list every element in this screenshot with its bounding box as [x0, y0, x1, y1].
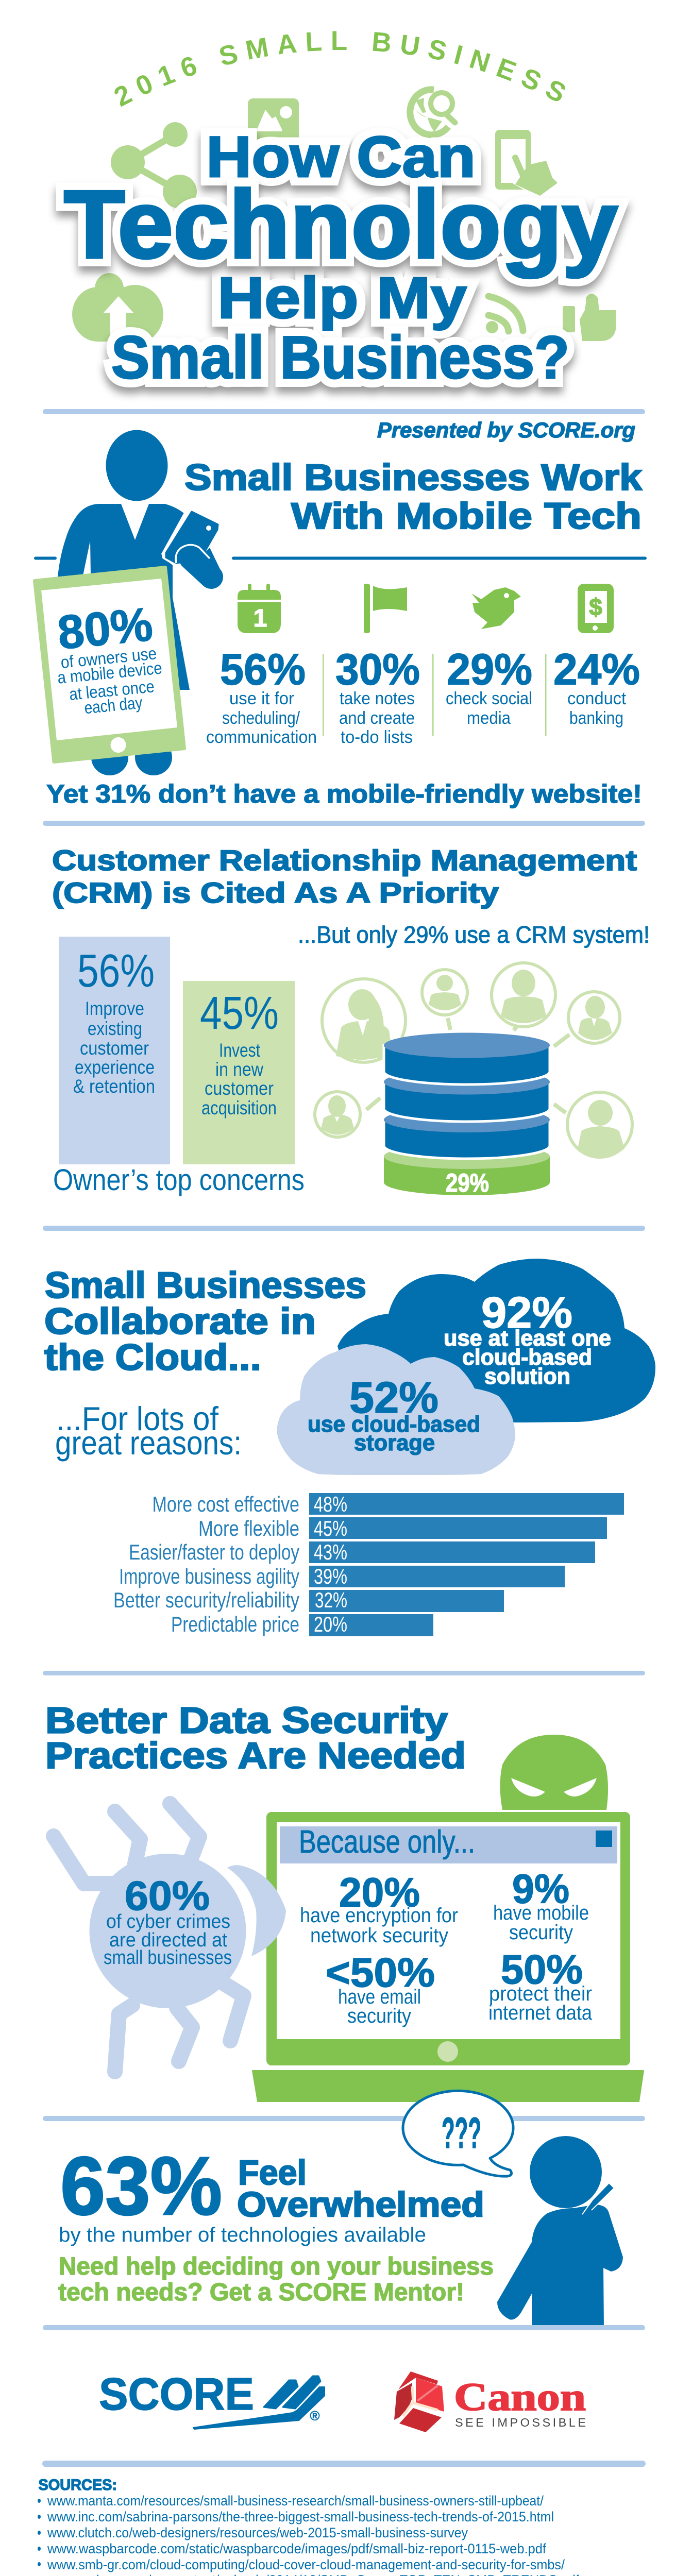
bar: deploy: 43%: [314, 1540, 347, 1564]
sources list: www.smb-gr.com/cloud-computing/cloud-cover-cloud-management-and-security-for-smbs/: [47, 2557, 565, 2572]
presenter credit: Presented by SCORE.org: [377, 418, 635, 442]
bar: flexible: [198, 1516, 607, 1540]
panel: mobile tech: [34, 418, 647, 808]
speech bubble: [403, 2091, 513, 2176]
heading: CRM: Customer Relationship Management: [52, 844, 637, 876]
stat: 20%: 20%: [339, 1869, 420, 1916]
stat: 80%: at least once: [69, 676, 155, 704]
panel: data security: [45, 1700, 644, 2102]
icon: calendar: [238, 584, 281, 633]
stat: 80%: each day: [83, 693, 143, 717]
icon: hacker head: [500, 1735, 608, 1810]
bar: agility: 39%: [314, 1564, 347, 1588]
stat: 9%: security: [509, 1921, 573, 1944]
icon: thumbs up: [563, 294, 616, 341]
window title bar: Because only...: [299, 1824, 475, 1860]
bar chart: reasons: [113, 1492, 624, 1636]
stat: 80%: a mobile device: [57, 658, 163, 687]
icon: bug: small businesses: [104, 1947, 232, 1969]
stat: under 50%: [326, 1950, 435, 2027]
title: Help My: Help My: [217, 265, 467, 330]
logo: SCORE: ®: [310, 2408, 320, 2424]
cloud: 52%: storage: [354, 1430, 435, 1455]
tablet: [35, 567, 184, 762]
concern box: 56%: & retention: [73, 1076, 155, 1097]
stat: 29% social: media: [467, 708, 511, 728]
stat: 20%: network security: [310, 1924, 448, 1947]
speech bubble: ???: [442, 2109, 481, 2157]
stat: 63%: 63%: [60, 2140, 222, 2232]
heading: feel overwhelmed: [237, 2153, 484, 2224]
concern box: 45%: in new: [215, 1059, 263, 1080]
bar: price: 20%: [314, 1612, 347, 1636]
cloud: 92%: solution: [484, 1364, 570, 1389]
heading: mobile tech: With Mobile Tech: [291, 496, 642, 537]
stat: 9%: [493, 1866, 589, 1944]
heading: security: Practices Are Needed: [45, 1736, 466, 1776]
bar: cost: [153, 1492, 624, 1516]
callout: SCORE mentor: tech needs? Get a SCORE Mentor!: [58, 2279, 464, 2306]
stat: 50%: 50%: [501, 1946, 583, 1992]
bar: price: [171, 1612, 433, 1636]
stat: under 50%: security: [347, 2005, 411, 2027]
concern box: 45%: Invest: [219, 1040, 261, 1061]
network of people icons: [315, 963, 632, 1157]
concern box: 45%: 45%: [200, 988, 279, 1039]
concern box: 56%: existing: [88, 1018, 142, 1039]
stat: 24% banking: [553, 645, 640, 728]
stat: 80%: 80%: [56, 598, 155, 659]
heading: cloud: the Cloud...: [44, 1337, 261, 1378]
stat: 56% scheduling: use it for: [229, 689, 294, 708]
callout: SCORE mentor: Need help deciding on your business: [59, 2253, 494, 2280]
stat: 30% notes: to-do lists: [341, 727, 413, 747]
panel: CRM: [52, 844, 650, 1197]
label: 29%: 29%: [446, 1168, 489, 1197]
icon: touch phone: [495, 130, 562, 199]
panel: sources: [38, 2477, 647, 2576]
cloud: 92%: [337, 1259, 655, 1422]
stat: 24% banking: conduct: [567, 689, 627, 708]
stat: under 50%: <50%: [326, 1950, 435, 1995]
heading: mobile tech: [184, 457, 643, 537]
subheading: great reasons: ...For lots of: [56, 1400, 219, 1437]
icon: confused person: [497, 2136, 623, 2328]
stat: 80%: [56, 598, 163, 717]
disk: green 29%: [384, 1144, 550, 1195]
heading: mobile tech: Small Businesses Work: [184, 457, 643, 498]
icon: bug: [54, 1804, 286, 2072]
stat: 24% banking: 24%: [553, 645, 640, 694]
bar: agility: [119, 1564, 565, 1588]
icon: image: [248, 98, 299, 142]
heading: cloud: Collaborate in: [44, 1301, 316, 1342]
sources list: [38, 2493, 647, 2576]
subheading: only 29%: ...But only 29% use a CRM system!: [298, 921, 650, 948]
disk: second: [384, 1070, 550, 1122]
cloud: 52%: 52%: [349, 1374, 438, 1422]
cloud: 92%: cloud-based: [462, 1345, 592, 1370]
icon: bug: of cyber crimes: [106, 1911, 230, 1933]
title: How Can: How Can: [206, 125, 476, 189]
stat: 30% notes: 30%: [335, 645, 420, 694]
stat: 50%: [488, 1946, 593, 2024]
sources list: www.waspbarcode.com/static/waspbarcode/images/pdf/small-biz-report-0115-web.pdf: [47, 2541, 546, 2556]
stat: 30% notes: [335, 645, 420, 747]
stat: 20%: have encryption for: [300, 1904, 458, 1927]
callout: mobile-friendly: Yet 31% don’t have a mobile-friendly website!: [46, 779, 642, 808]
bar: security: Better security/reliability: [113, 1588, 299, 1612]
bar: flexible: 45%: [314, 1516, 347, 1540]
title: Small Business?: Small Business?: [111, 324, 569, 391]
icon: banking phone: [578, 584, 614, 633]
concern box: 56%: customer: [80, 1038, 149, 1059]
disk: top: [384, 1032, 550, 1084]
heading: CRM: [52, 844, 637, 909]
callout: SCORE mentor: [58, 2253, 494, 2306]
database: stacked disks: [384, 1032, 550, 1197]
heading: cloud: [44, 1265, 366, 1378]
stat: 30% notes: take notes: [340, 689, 415, 708]
icon: bird: [471, 587, 521, 629]
icon: calendar: 1: [254, 605, 267, 632]
panel: header: [50, 31, 634, 399]
bar: flexible: More flexible: [198, 1516, 299, 1540]
window title bar: [280, 1824, 617, 1863]
bar: price: Predictable price: [171, 1612, 299, 1636]
stat: 29% social: check social: [446, 689, 532, 708]
text: number of technologies: by the number of technologies available: [59, 2224, 426, 2246]
stat: 9%: 9%: [512, 1866, 569, 1911]
bar: cost: More cost effective: [153, 1492, 299, 1516]
concern box: 45%: customer: [205, 1078, 274, 1099]
stat: 29% social: 29%: [447, 645, 532, 694]
bar: deploy: [129, 1540, 595, 1564]
laptop: [252, 1812, 644, 2102]
title: Help My: Help My: [217, 265, 467, 330]
concern box: 56%: experience: [75, 1057, 155, 1078]
cloud: 52%: use cloud-based: [308, 1412, 480, 1437]
icon: share: [111, 122, 197, 209]
title: Small Business?: Small Business?: [111, 324, 569, 391]
icon: globe search: [410, 90, 455, 135]
stat: 29% social: [446, 645, 532, 728]
cloud: 92%: use at least one: [444, 1326, 611, 1351]
stat: under 50%: have email: [338, 1986, 421, 2008]
heading: feel overwhelmed: Overwhelmed: [237, 2185, 484, 2224]
stat: 30% notes: and create: [339, 708, 415, 728]
stat: 80%: of owners use: [60, 643, 158, 672]
heading: CRM: (CRM) is Cited As A Priority: [52, 876, 499, 909]
arched heading: 2016 Small Business: 2016 SMALL BUSINESS: [114, 31, 565, 107]
panel: cloud: [44, 1259, 655, 1636]
icon: flag: [364, 584, 407, 633]
heading: sources: SOURCES:: [38, 2477, 117, 2494]
disk: third: [384, 1107, 550, 1159]
stat: 50%: internet data: [488, 2002, 593, 2024]
panel: overwhelmed: [58, 2091, 623, 2328]
bar: agility: Improve business agility: [119, 1564, 299, 1588]
bar: security: [113, 1588, 504, 1612]
concern box: 45%: acquisition: [201, 1097, 277, 1118]
heading: security: [45, 1700, 466, 1776]
stat: 9%: have mobile: [493, 1902, 589, 1924]
illustration: business person with phone and tablet: [35, 430, 223, 775]
sources list: www.clutch.co/web-designers/resources/web-2015-small-business-survey: [47, 2525, 468, 2540]
icon: cloud upload: [72, 273, 163, 344]
sources list: www.manta.com/resources/small-business-research/small-business-owners-still-upbeat/: [47, 2493, 544, 2509]
stat: 24% banking: banking: [569, 708, 623, 728]
title: Technology: Technology: [64, 171, 618, 278]
bar: deploy: Easier/faster to deploy: [129, 1540, 299, 1564]
title: Technology: Technology: [64, 171, 618, 278]
subheading: great reasons: [55, 1400, 242, 1462]
concern box: 56%: Improve: [85, 998, 144, 1019]
stat: 50%: protect their: [489, 1982, 592, 2005]
concern box: 45%: [183, 981, 295, 1164]
concern box: 56%: [59, 937, 170, 1164]
logo: Canon: [394, 2371, 586, 2432]
stat: 56% scheduling: communication: [206, 727, 317, 747]
stat: 20%: [300, 1869, 458, 1947]
icon: bug: 60%: [125, 1873, 210, 1919]
icon: wifi: [486, 296, 523, 333]
icon: banking phone: $: [589, 594, 602, 620]
heading: security: Better Data Security: [45, 1700, 448, 1741]
bar: security: 32%: [315, 1588, 347, 1612]
heading: cloud: Small Businesses: [45, 1265, 366, 1306]
caption: owner's top concerns: Owner’s top concerns: [53, 1163, 305, 1197]
title: How Can: How Can: [206, 125, 476, 189]
heading: feel overwhelmed: Feel: [238, 2153, 307, 2192]
subheading: great reasons: great reasons:: [55, 1424, 242, 1462]
logo: Canon: SEE IMPOSSIBLE: [455, 2416, 586, 2429]
logo: Canon: Canon: [454, 2376, 586, 2419]
logo: SCORE: [99, 2368, 325, 2429]
concern box: 56%: 56%: [77, 945, 155, 997]
stat: 56% scheduling: scheduling/: [222, 708, 300, 728]
icon: bug: are directed at: [109, 1929, 227, 1951]
bar: cost: 48%: [314, 1492, 347, 1516]
stat: 56% scheduling: 56%: [220, 645, 306, 694]
cloud: 52%: [277, 1344, 515, 1475]
cloud: 92%: 92%: [481, 1289, 572, 1337]
sources list: www.inc.com/sabrina-parsons/the-three-biggest-small-business-tech-trends-of-2015.html: [47, 2509, 554, 2524]
stat: 56% scheduling: [206, 645, 317, 747]
logo: SCORE: SCORE: [99, 2368, 254, 2419]
